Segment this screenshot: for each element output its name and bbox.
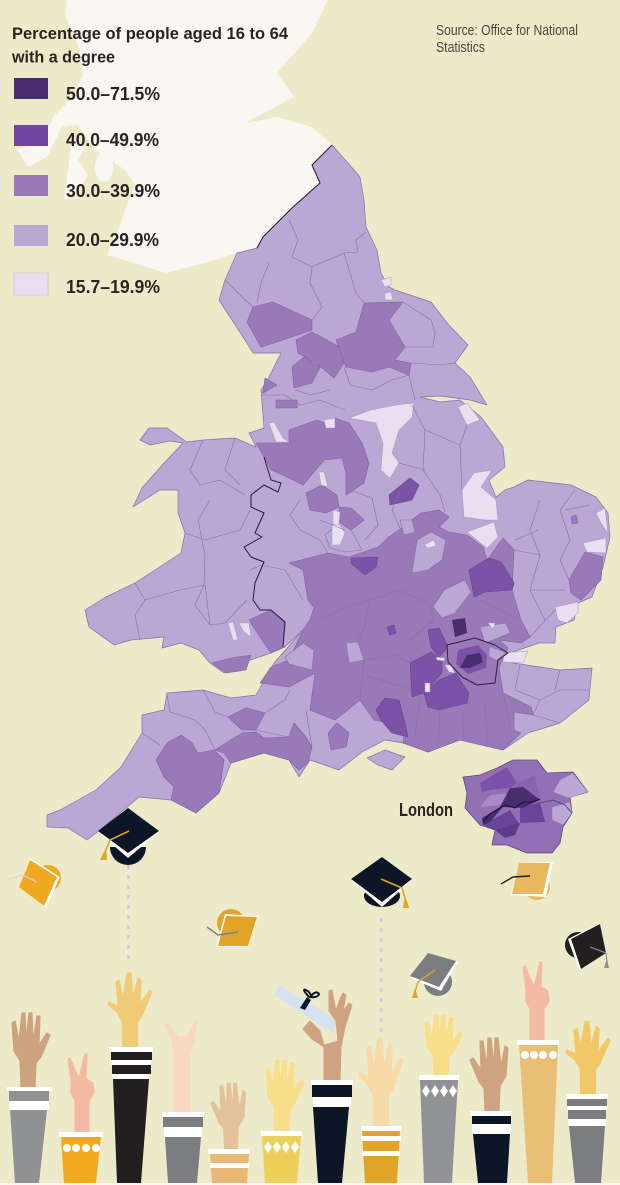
source note <box>436 22 578 56</box>
icon: black mortarboard, right <box>565 923 609 970</box>
legend: 50.0–71.5% <box>66 84 160 104</box>
legend <box>14 78 160 297</box>
source note: Statistics <box>436 39 485 56</box>
30.0-39.9% regions <box>156 302 603 813</box>
legend: 15.7–19.9% <box>66 277 160 297</box>
hand and cup 12: yellow hand, grey sleeve <box>566 1022 610 1183</box>
legend: 30.0–39.9% <box>66 181 160 201</box>
source note: Source: Office for National <box>436 22 578 39</box>
icon: navy mortarboard, left <box>98 808 159 865</box>
dotted flight path, left <box>127 865 130 962</box>
map: England and Wales degree share by local authority <box>47 145 610 840</box>
icon: orange mortarboard, left <box>7 858 61 908</box>
local authority boundary lines <box>135 220 590 750</box>
hand and cup 3: yellow hand, black sleeve <box>108 973 153 1183</box>
hand and cup 9: pale yellow hand, grey sleeve <box>419 1015 463 1183</box>
hand and cup 7: tan hand holding diploma, navy sleeve <box>303 990 353 1183</box>
20.0-29.9% pockets in the south <box>285 520 510 670</box>
hand and cup 10: tan hand, navy sleeve <box>470 1038 512 1183</box>
hand and cup 5: light tan hand, sand sleeve <box>208 1083 250 1183</box>
legend: 40.0–49.9% <box>66 130 159 150</box>
icon: grey mortarboard <box>410 953 458 998</box>
London label: London <box>399 800 453 820</box>
dotted flight path, centre <box>380 918 382 1036</box>
hand and cup 11: peach peace sign, sand sleeve <box>517 962 559 1183</box>
15.7-19.9% regions <box>228 277 608 692</box>
legend: 20.0–29.9% <box>66 230 159 250</box>
England-Wales and Scottish borders <box>244 145 332 647</box>
Scotland landmass <box>17 0 332 273</box>
icon: gold mortarboard, middle <box>207 909 258 947</box>
London inset map <box>463 760 588 853</box>
title: with a degree <box>11 48 115 66</box>
title <box>11 24 289 66</box>
icon: navy mortarboard, centre <box>351 857 412 908</box>
icon: gold mortarboard, upper right <box>501 862 553 900</box>
hand and cup 4: pink rock sign, grey sleeve <box>162 1021 204 1183</box>
hand and cup 6: pale yellow hand, yellow sleeve <box>261 1060 304 1183</box>
hand and cup 8: pale peach hand, gold sleeve <box>359 1038 403 1183</box>
London on the main map <box>447 638 508 685</box>
icon: rolled diploma with ribbon <box>274 985 338 1033</box>
40.0-49.9% regions <box>351 478 514 737</box>
Isle of Wight <box>367 750 405 770</box>
hand and cup 1: tan hand, grey sleeve <box>7 1013 52 1183</box>
50.0-71.5% region: north of London <box>452 618 467 637</box>
title: Percentage of people aged 16 to 64 <box>12 24 289 43</box>
base landmass: 20.0-29.9% <box>47 145 610 840</box>
hand and cup 2: peach peace sign, orange sleeve <box>59 1054 103 1183</box>
